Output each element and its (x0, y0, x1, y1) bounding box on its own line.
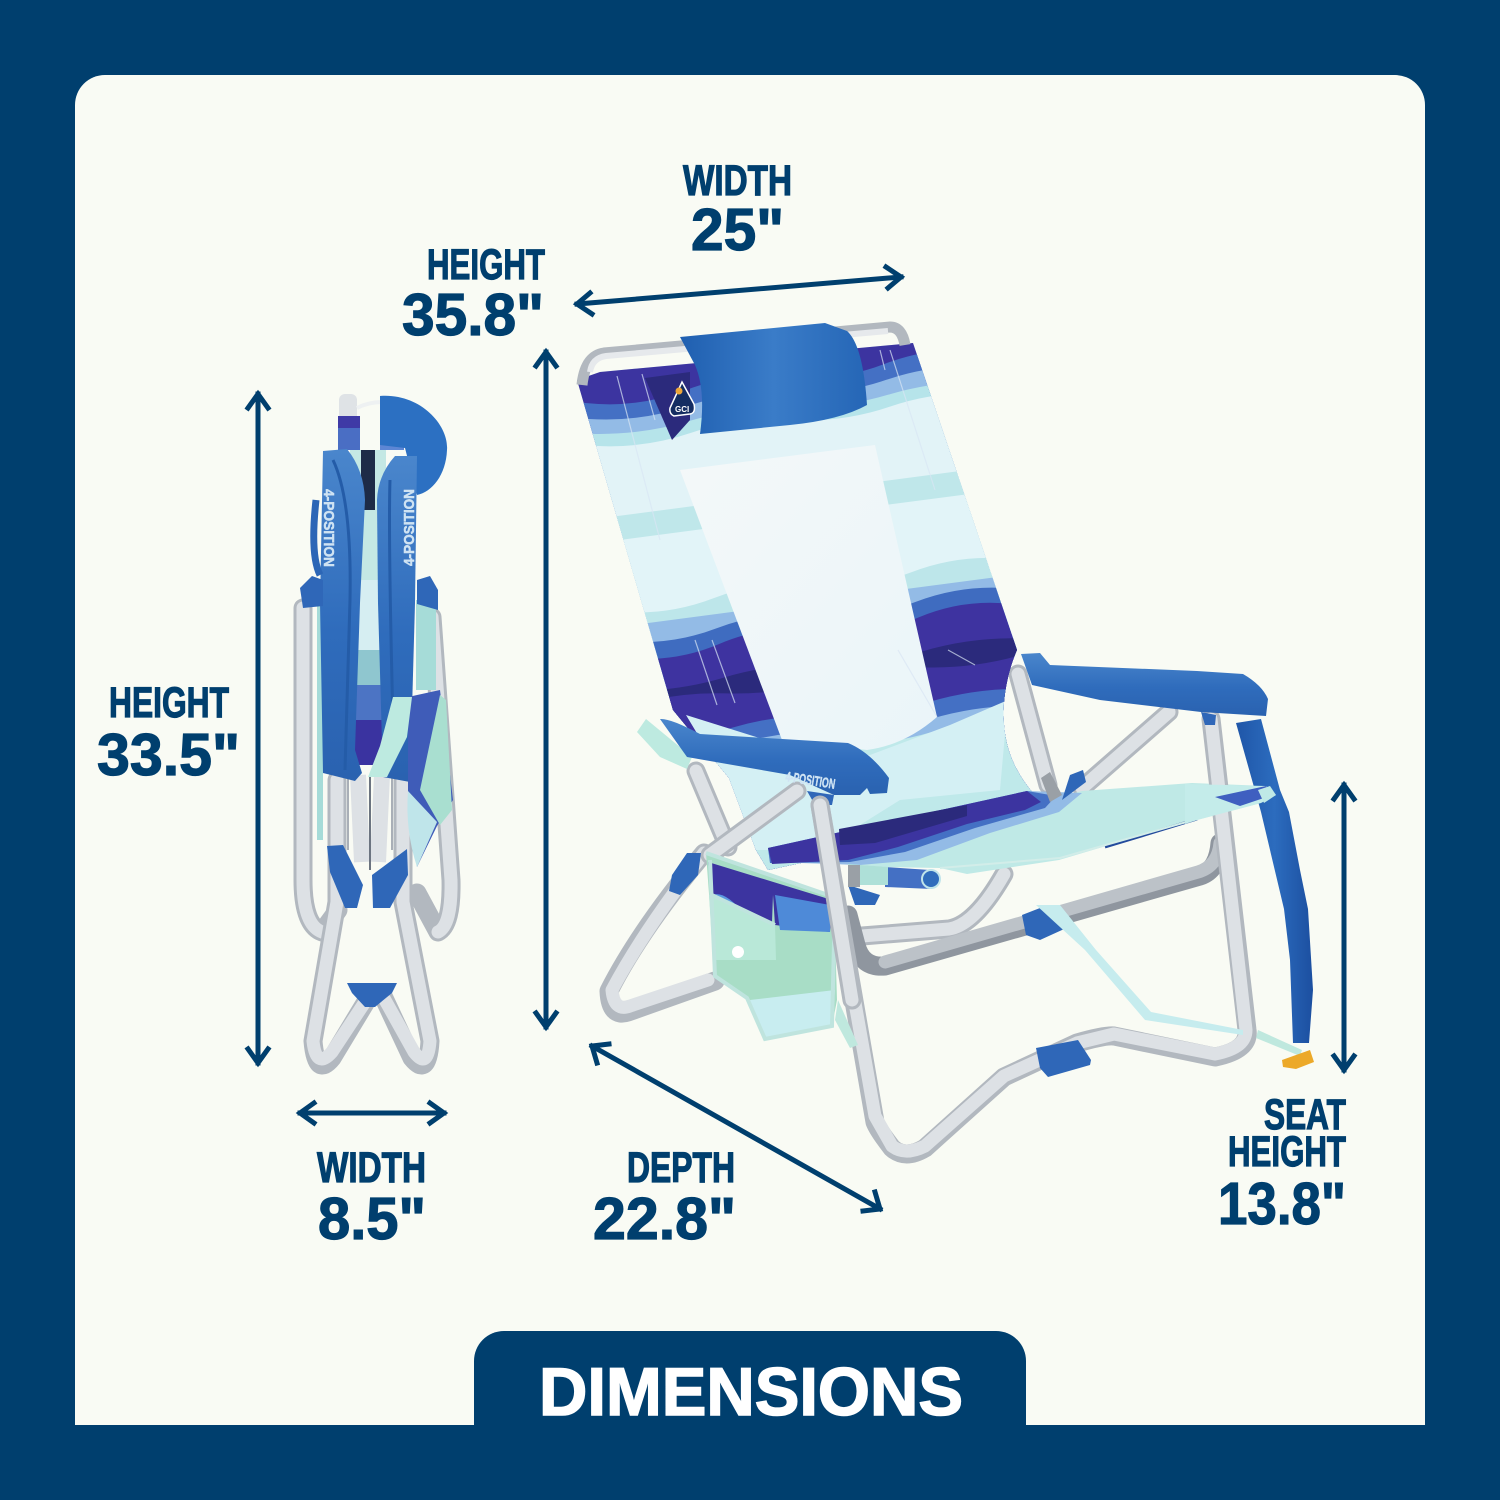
label: folded width (317, 1144, 426, 1252)
heading tab: dimensions: DIMENSIONS (539, 1354, 963, 1430)
label: depth: DEPTH (627, 1144, 735, 1192)
icon: GCI logo badge (670, 382, 694, 416)
folded armrest right (377, 456, 418, 782)
icon: GCI logo badge: GCI (675, 405, 689, 414)
backpack strap (1236, 719, 1313, 1043)
headrest top tube (582, 327, 905, 385)
headrest pillow (680, 323, 867, 434)
folded armrest right: 4-POSITION (401, 489, 418, 566)
label: depth (593, 1144, 736, 1252)
seat hinges (848, 772, 1062, 887)
label: chair width: WIDTH (683, 157, 792, 205)
label: folded height: HEIGHT (109, 679, 229, 727)
folded side pocket and strap (368, 690, 453, 867)
front frame tubes (609, 719, 1247, 1154)
arrow: chair height (536, 352, 556, 1027)
label: depth: 22.8" (593, 1186, 736, 1252)
label: folded width: WIDTH (317, 1144, 426, 1192)
armrest right (1021, 653, 1268, 716)
label: seat height (1218, 1091, 1346, 1237)
folded tubes (303, 608, 451, 1065)
illustration: folded chair (300, 394, 453, 1065)
folded headrest pillow (380, 396, 447, 495)
arrow: folded width (300, 1103, 444, 1123)
label: folded height: 33.5" (97, 722, 240, 788)
side pocket (706, 853, 858, 1048)
arrow: depth (592, 1044, 880, 1211)
back fabric with wave bands (577, 343, 1032, 870)
folded fabric (317, 394, 436, 840)
foot strap and yellow foot (1036, 905, 1314, 1069)
seat right end over frame and strap (1185, 784, 1276, 824)
illustration: beach chair (576, 322, 1314, 1164)
label: seat height: HEIGHT (1228, 1128, 1346, 1176)
label: folded width: 8.5" (318, 1186, 426, 1252)
label: chair height (402, 241, 545, 348)
mesh back panel (680, 445, 937, 750)
dark band near logo (645, 372, 690, 440)
front tube over pocket (820, 805, 852, 1000)
label: seat height: SEAT (1264, 1091, 1346, 1139)
armrest label: 4-POSITION (785, 768, 836, 792)
label: chair height: 35.8" (402, 282, 544, 348)
label: seat height: 13.8" (1218, 1171, 1346, 1237)
seat fabric (768, 783, 1275, 874)
folded armrest left: 4-POSITION (320, 489, 337, 567)
arrow: folded height (248, 394, 268, 1063)
armrest left (637, 719, 889, 795)
folded hinges (300, 576, 438, 1007)
label: folded height (97, 679, 240, 788)
seat front roll (848, 864, 940, 889)
arrow: seat height (1334, 785, 1354, 1070)
heading tab: dimensions (474, 1331, 1026, 1430)
folded armrest left (314, 449, 365, 781)
arm and frame connectors (669, 712, 1216, 1077)
rear frame tubes (696, 674, 1220, 966)
label: chair width: 25" (691, 197, 784, 263)
label: chair height: HEIGHT (427, 241, 545, 289)
label: chair width (683, 157, 792, 263)
arrow: chair width (577, 267, 901, 314)
